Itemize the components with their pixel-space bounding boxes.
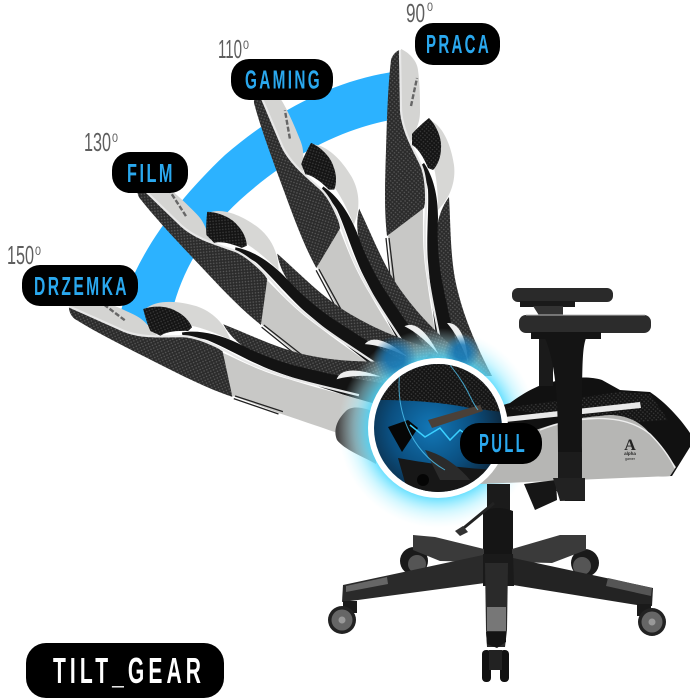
- pill: GAMING: GAMING: [245, 64, 322, 94]
- pill: DRZEMKA: DRZEMKA: [34, 271, 129, 301]
- label: 150 degrees: 150: [7, 240, 34, 270]
- seat cushion: [470, 378, 690, 484]
- seat logo: gamer: [625, 457, 636, 461]
- backrest hinge cover: [335, 408, 380, 464]
- blue recline arc: [120, 72, 392, 326]
- pill: PULL: [460, 423, 542, 464]
- title pill: TILT_GEAR: TILT_GEAR: [53, 650, 205, 691]
- seat logo: alpha: [624, 451, 636, 456]
- base: gas lift, lever and tilt knob: [455, 478, 585, 560]
- front armrest: [519, 315, 651, 501]
- pill: PULL: PULL: [479, 428, 527, 458]
- pill: FILM: FILM: [127, 158, 175, 188]
- backrest at 130 degrees: [127, 119, 434, 425]
- label: 130 degrees: 130: [84, 127, 111, 157]
- label: 130 degrees: 0: [112, 131, 118, 145]
- label: 110 degrees: 0: [243, 38, 249, 52]
- star base legs: [342, 535, 653, 648]
- title pill: TILT_GEAR: [26, 643, 224, 698]
- seat logo: A: [624, 437, 636, 454]
- rear wheels: [400, 547, 599, 577]
- cyan glow around detail circle: [338, 328, 538, 528]
- seat logo: [624, 437, 636, 461]
- label: 90 degrees: 0: [427, 0, 433, 14]
- backrest at 90 degrees: [385, 49, 492, 376]
- pull mechanism detail circle: [368, 358, 508, 500]
- label: 150 degrees: 0: [35, 244, 41, 258]
- front wheels: [328, 601, 666, 682]
- pill: FILM: [112, 152, 188, 193]
- pill: GAMING: [231, 59, 333, 100]
- pill: DRZEMKA: [22, 265, 138, 306]
- backrest at 150 degrees: [62, 223, 404, 458]
- pill: PRACA: PRACA: [426, 29, 491, 59]
- rear armrest: [512, 288, 613, 386]
- pill: PRACA: [415, 23, 500, 65]
- backrest at 110 degrees: [244, 55, 466, 399]
- label: 110 degrees: 110: [218, 34, 242, 64]
